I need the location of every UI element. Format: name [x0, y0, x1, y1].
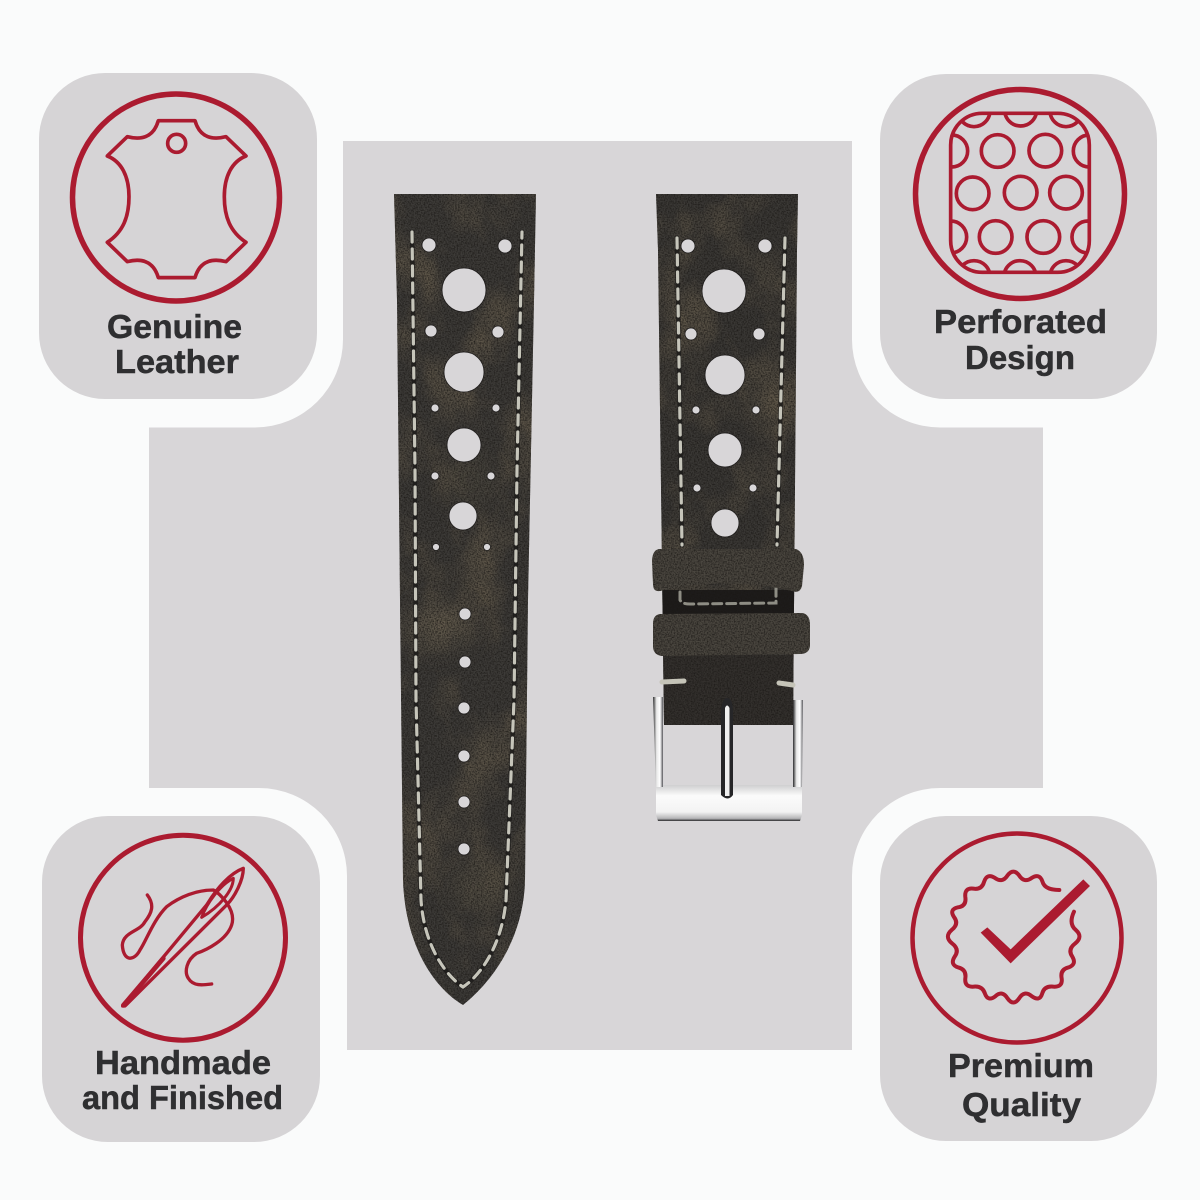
label: Perforated Design: Perforated: [934, 303, 1107, 340]
card background: [880, 816, 1157, 1141]
label: Premium Quality: Premium: [948, 1047, 1094, 1084]
panel: handmade and finished: [42, 816, 320, 1142]
label: Perforated Design: [934, 303, 1107, 376]
card background: [880, 74, 1157, 399]
icon: needle and thread in circle: [80, 835, 286, 1040]
label: Handmade and Finished: and Finished: [82, 1079, 283, 1116]
panel: genuine leather: [39, 73, 317, 399]
label: Genuine Leather: Genuine: [107, 308, 242, 345]
label: Handmade and Finished: Handmade: [95, 1044, 271, 1081]
photo: buckle strap piece: [650, 190, 812, 821]
keepers: [650, 545, 812, 658]
perforations: long strap: [422, 238, 512, 855]
label: Handmade and Finished: [82, 1044, 283, 1116]
icon: seal and check mark in circle: [912, 834, 1122, 1042]
icon: leather hide in circle: [72, 94, 280, 301]
icon: perforated pattern in circle: [916, 90, 1124, 298]
card background: [39, 73, 317, 399]
label: Premium Quality: Quality: [962, 1086, 1082, 1123]
label: Premium Quality: [948, 1047, 1094, 1123]
label: Genuine Leather: [107, 308, 242, 380]
buckle pin: [721, 698, 733, 798]
panel: perforated design: [880, 74, 1157, 399]
photo: long strap piece: [390, 190, 540, 1010]
panel: premium quality: [880, 816, 1157, 1141]
perforations: buckle strap: [681, 239, 772, 537]
label: Perforated Design: Design: [965, 339, 1075, 376]
label: Genuine Leather: Leather: [115, 343, 239, 380]
card background: [42, 816, 320, 1142]
stitching: buckle strap: [662, 238, 793, 685]
stitching: long strap: [412, 232, 522, 987]
buckle frame: [653, 697, 803, 821]
